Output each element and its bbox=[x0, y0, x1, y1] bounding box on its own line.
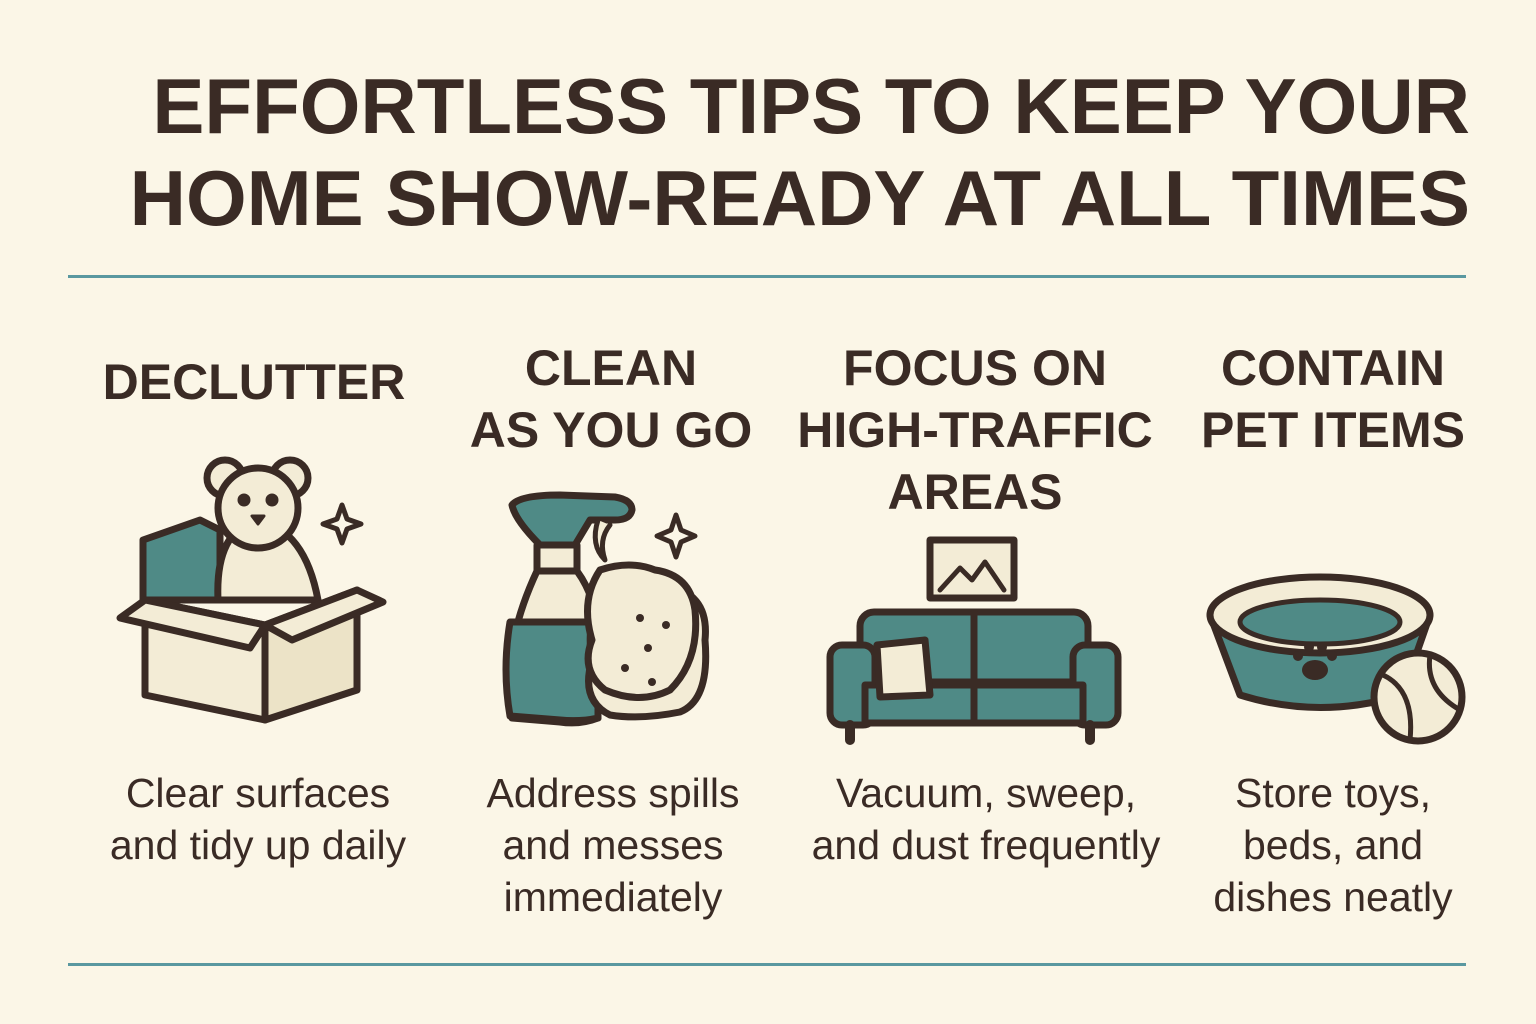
heading: clean as you go: AS YOU GO bbox=[470, 402, 752, 458]
icon: spray bottle and sponge bbox=[506, 495, 706, 723]
text: clean: Address spills bbox=[487, 770, 739, 816]
heading: focus on high-traffic areas: FOCUS ON bbox=[843, 340, 1107, 396]
text: pet bbox=[1213, 770, 1453, 920]
text: pet: beds, and bbox=[1243, 822, 1423, 868]
title: HOME SHOW-READY AT ALL TIMES bbox=[130, 154, 1470, 242]
text: clean bbox=[486, 770, 739, 920]
heading: declutter: DECLUTTER bbox=[103, 354, 405, 410]
text: declutter: and tidy up daily bbox=[110, 822, 406, 868]
heading: clean as you go bbox=[470, 340, 752, 458]
heading: focus on high-traffic areas bbox=[797, 340, 1153, 520]
text: focus: and dust frequently bbox=[812, 822, 1160, 868]
text: pet: Store toys, bbox=[1235, 770, 1431, 816]
text: focus: Vacuum, sweep, bbox=[836, 770, 1136, 816]
heading: clean as you go: CLEAN bbox=[525, 340, 697, 396]
icon: box with teddy bear bbox=[120, 460, 383, 720]
text: focus bbox=[812, 770, 1160, 868]
heading: focus on high-traffic areas: AREAS bbox=[887, 464, 1063, 520]
heading: focus on high-traffic areas: HIGH-TRAFFIC bbox=[797, 402, 1153, 458]
icon: pet bowl and ball bbox=[1210, 577, 1462, 741]
heading: contain pet items bbox=[1201, 340, 1465, 458]
title: EFFORTLESS TIPS TO KEEP YOUR bbox=[152, 62, 1470, 150]
icon: sofa with picture bbox=[830, 540, 1118, 740]
text: clean: and messes bbox=[502, 822, 724, 868]
text: clean: immediately bbox=[504, 874, 722, 920]
text: declutter bbox=[110, 770, 406, 868]
title bbox=[130, 62, 1470, 242]
heading: contain pet items: CONTAIN bbox=[1221, 340, 1445, 396]
text: declutter: Clear surfaces bbox=[126, 770, 390, 816]
text: pet: dishes neatly bbox=[1213, 874, 1453, 920]
heading: contain pet items: PET ITEMS bbox=[1201, 402, 1465, 458]
